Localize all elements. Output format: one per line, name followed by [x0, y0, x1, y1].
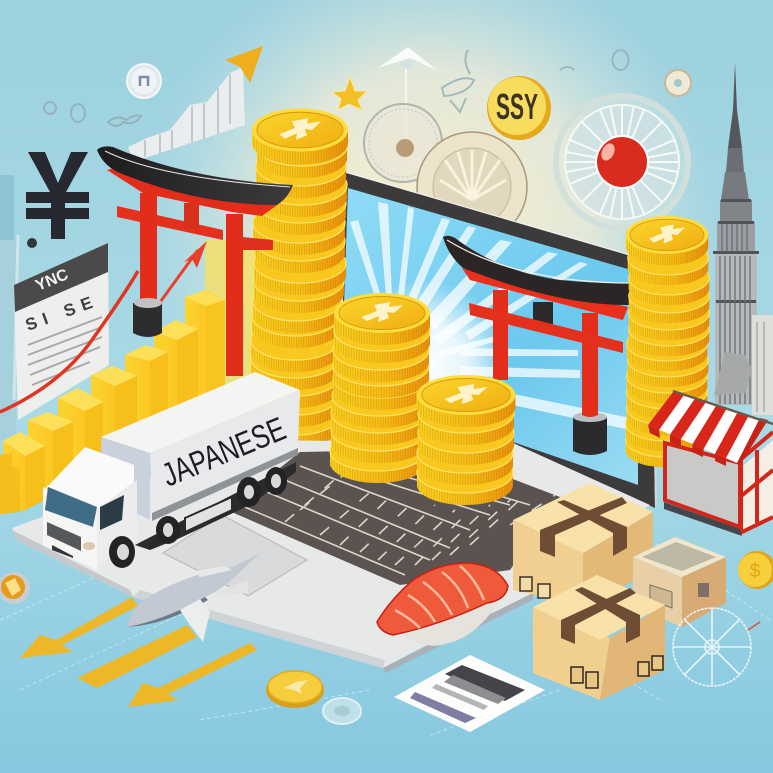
tower: [713, 62, 759, 405]
document header: YNC: [33, 266, 71, 295]
SSY coin: SSY: [496, 86, 538, 127]
icon: small badge: [127, 64, 161, 98]
left pillar: [140, 193, 157, 305]
arrow one: [20, 597, 138, 658]
pillars: [493, 290, 598, 413]
shop window: [665, 443, 740, 527]
document header: [14, 243, 108, 312]
coin stack: tall: [251, 108, 348, 447]
bar 4: [58, 388, 103, 490]
screen rays: [350, 202, 640, 432]
awning: [648, 391, 773, 466]
trackpad: [163, 515, 307, 596]
parcel box small: [633, 537, 726, 627]
torii gate left: [97, 146, 293, 376]
wheel glass: [673, 608, 760, 686]
faint glass coin: [323, 698, 361, 724]
bar 2: [3, 432, 45, 512]
icon: star: [332, 77, 367, 110]
right pillar: [226, 214, 243, 376]
box labels: [520, 577, 550, 598]
keyboard: [227, 450, 560, 585]
bar 1: [0, 453, 20, 514]
side frame: [738, 432, 773, 533]
tape: [540, 497, 627, 557]
coin right: [738, 551, 773, 589]
coin stack: front: [417, 375, 515, 505]
bar 5: [91, 366, 137, 475]
airplane: [127, 553, 260, 642]
paper barcode sheet: [394, 655, 545, 732]
pillar base: [573, 395, 607, 455]
document: [14, 243, 109, 420]
icon: fan wheel: [417, 132, 527, 242]
laptop screen: [340, 172, 656, 508]
coin right: $: [750, 561, 761, 582]
trailer: [101, 372, 300, 521]
small coin left: [0, 572, 30, 604]
yellow arrows: [20, 597, 257, 707]
crossbeam: [117, 206, 223, 240]
yen symbol: [26, 152, 89, 248]
delivery truck: [43, 372, 300, 570]
shop: [648, 391, 773, 536]
icon: house chevron: [378, 47, 438, 145]
strut: [184, 203, 199, 229]
icon: faint glass ornaments: [44, 50, 629, 126]
document text: SI SE: [23, 293, 95, 335]
gold bars chart: [0, 290, 225, 514]
black roof: [443, 236, 648, 305]
front wheel: [109, 536, 135, 568]
cab: [43, 447, 137, 570]
arrow band: [77, 625, 197, 688]
coin bottom center: [266, 671, 324, 708]
trailer label: JAPANESE: [157, 410, 291, 493]
icon: rising chart with gold arrow: [128, 46, 263, 162]
coin stack: middle: [330, 293, 430, 483]
sushi: [377, 563, 508, 646]
bar 3: [28, 412, 73, 505]
red lintel: [462, 268, 628, 320]
arrow three: [128, 643, 257, 707]
torii gate on screen: [443, 236, 648, 455]
coin stack: rear right: [626, 216, 709, 467]
icon: glass coin dial: [364, 104, 442, 182]
background building left edge: [0, 175, 18, 440]
bar 8: [185, 290, 225, 405]
icon: small clock badge: [665, 70, 691, 96]
parcel box back: [513, 483, 653, 605]
yellow glow column: [205, 240, 260, 390]
SSY coin: [487, 76, 551, 140]
grille: [47, 522, 81, 551]
icon: rising sun dial: [556, 96, 688, 228]
windshield: [45, 487, 97, 527]
red trend arrow: [0, 241, 207, 412]
rice: [403, 596, 498, 646]
side window: [100, 495, 124, 530]
roof: [97, 146, 293, 205]
bar 6: [125, 345, 168, 450]
lintel: [107, 165, 277, 216]
bar 7: [154, 320, 198, 425]
box labels: [571, 656, 663, 688]
rear wheels: [156, 467, 287, 544]
parcel box front: [533, 575, 665, 700]
background skyline right: [752, 315, 773, 415]
pillar base: [133, 298, 162, 337]
chassis: [135, 462, 296, 550]
salmon: [377, 563, 508, 635]
crossbeam: [469, 303, 623, 353]
document text: [23, 293, 102, 385]
laptop base: [12, 440, 650, 673]
